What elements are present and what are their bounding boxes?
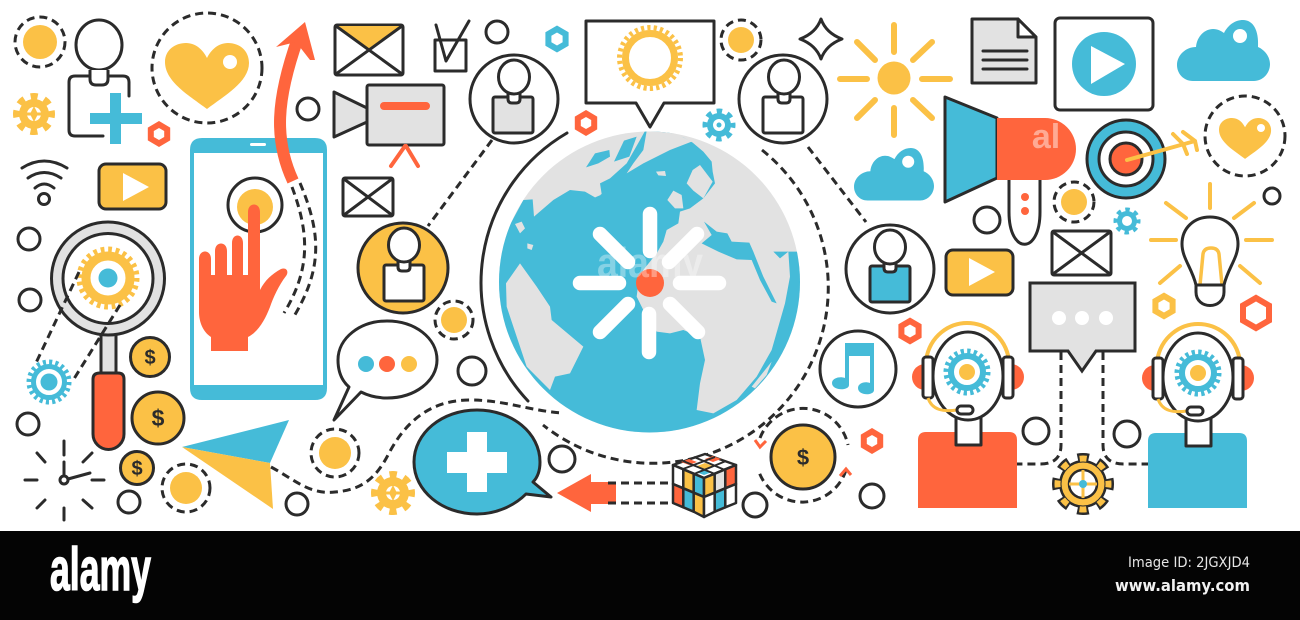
site url: www.alamy.com [1115, 576, 1250, 595]
dashed connector person to yellow person [428, 140, 492, 226]
person circle yellow [358, 223, 448, 313]
icon: video camera [334, 85, 444, 166]
speech box with sun gear [586, 21, 714, 127]
icon: megaphone: al [1032, 118, 1060, 156]
icon: video play box [1055, 18, 1153, 110]
alamy logo: alamy [50, 536, 151, 603]
icon: paper plane [182, 420, 289, 509]
coins: $ [152, 405, 165, 431]
icon: yellow gear [17, 97, 51, 131]
dashed circle by megaphone [1054, 182, 1094, 222]
hexagon orange music [864, 432, 880, 450]
icon: small envelope [343, 178, 393, 216]
double dashed arcs near phone [284, 183, 316, 318]
person circle top-left of globe [470, 55, 558, 143]
icon: diamond [800, 19, 842, 59]
icon: rubik cube [673, 454, 736, 517]
dashed circle yellow dot by bubble [435, 301, 473, 339]
icon: envelope right [1052, 231, 1111, 275]
icon: yellow gear lower [375, 475, 411, 511]
dashed connector to blue person [808, 147, 866, 222]
stock footer band [0, 531, 1300, 620]
icon: music note circle [820, 331, 896, 407]
dashed connectors arrow to cube [608, 483, 670, 503]
icon: medical person [69, 20, 142, 144]
dashed connectors agents to box [1017, 352, 1148, 464]
spinner arms [580, 214, 719, 352]
orange arrow [557, 474, 616, 512]
agent right [1142, 324, 1254, 508]
gear in lens [80, 250, 136, 306]
yellow hexagon [1155, 296, 1173, 316]
icon: cloud large [1177, 20, 1270, 81]
icon: orange hexagon [151, 124, 167, 144]
icon: sun [840, 25, 950, 135]
orange hexagon left of agent [901, 321, 919, 341]
icon: yellow video tile right [946, 250, 1013, 295]
smartphone with hand [190, 138, 327, 400]
gray speech box [1030, 283, 1135, 371]
icon: target with arrow [1087, 120, 1197, 198]
image id: Image ID: 2JGXJD4 [1128, 555, 1250, 571]
blue gear under bubble [706, 112, 732, 138]
coins [120, 338, 184, 484]
icon: wifi [22, 161, 67, 204]
orbit ring around globe [481, 133, 828, 463]
icon: dollar coin with cycle arrows: $ [797, 445, 809, 470]
icon: document [972, 19, 1036, 83]
hand [199, 204, 287, 351]
dashed connectors magnifier to gear [35, 272, 120, 382]
icon: blue gear [29, 362, 69, 402]
speech bubble with dots [334, 321, 437, 420]
curved orange arrow [276, 22, 315, 181]
icon: heart dashed right [1205, 96, 1285, 176]
dashed circle yellow dot top-left [15, 17, 65, 67]
dashed circle yellow dot [311, 429, 359, 477]
globe with spinner: alamy [597, 239, 704, 286]
coins: $ [144, 347, 156, 369]
small outline circles [17, 21, 1280, 517]
orange hexagon globe [578, 114, 594, 132]
dashed circle yellow dot by plane [162, 464, 210, 512]
coins: $ [131, 458, 143, 480]
dashed circle top centre [721, 20, 761, 60]
icon: checkbox [435, 21, 469, 71]
icon: dollar coin with cycle arrows [755, 408, 851, 502]
dashed path plane to globe [271, 400, 563, 492]
blue hexagon [548, 29, 566, 49]
outlined yellow gear [1057, 458, 1109, 510]
icon: magnifying glass [52, 222, 164, 450]
agent left [912, 323, 1024, 508]
icon: light bulb [1151, 184, 1272, 306]
icon: cloud small [854, 148, 934, 200]
icon: clock [25, 441, 104, 520]
icon: heart in dashed circle [152, 13, 262, 123]
icon: yellow video tile [99, 164, 166, 209]
icon: megaphone [945, 97, 1076, 244]
globe with spinner [499, 132, 800, 432]
medical speech bubble [414, 410, 551, 514]
person circle blue body [846, 225, 934, 313]
icon: yellow envelope [335, 25, 403, 75]
person circle top-right of globe [739, 55, 827, 143]
blue gear [1116, 210, 1138, 232]
orange large hexagon [1243, 298, 1269, 328]
